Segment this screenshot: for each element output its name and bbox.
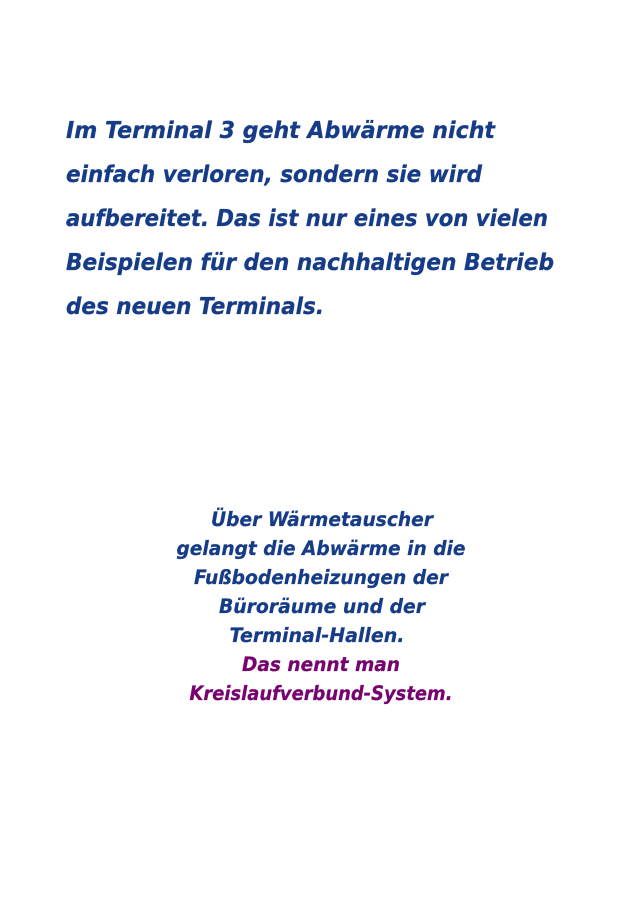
heading: intro statement — [66, 116, 554, 320]
text block: heat exchanger explanation: Über Wärmetauscher — [211, 507, 434, 531]
text block: heat exchanger explanation: gelangt die Abwärme in die — [176, 537, 466, 560]
text block: heat exchanger explanation: Kreislaufverbund-System. — [190, 682, 452, 705]
text block: heat exchanger explanation: Büroräume und der — [219, 595, 426, 618]
heading: intro statement: des neuen Terminals. — [66, 292, 324, 320]
heading: intro statement: Beispielen für den nachhaltigen Betrieb — [66, 248, 554, 276]
heading: intro statement: einfach verloren, sondern sie wird — [66, 160, 483, 188]
heading: intro statement: Im Terminal 3 geht Abwärme nicht — [66, 116, 496, 144]
heading: intro statement: aufbereitet. Das ist nur eines von vielen — [66, 204, 548, 232]
text block: heat exchanger explanation: Terminal-Hallen. — [230, 624, 404, 647]
text block: heat exchanger explanation: Das nennt man — [242, 653, 400, 676]
text block: heat exchanger explanation: Fußbodenheizungen der — [194, 566, 449, 589]
text block: heat exchanger explanation — [176, 507, 466, 705]
